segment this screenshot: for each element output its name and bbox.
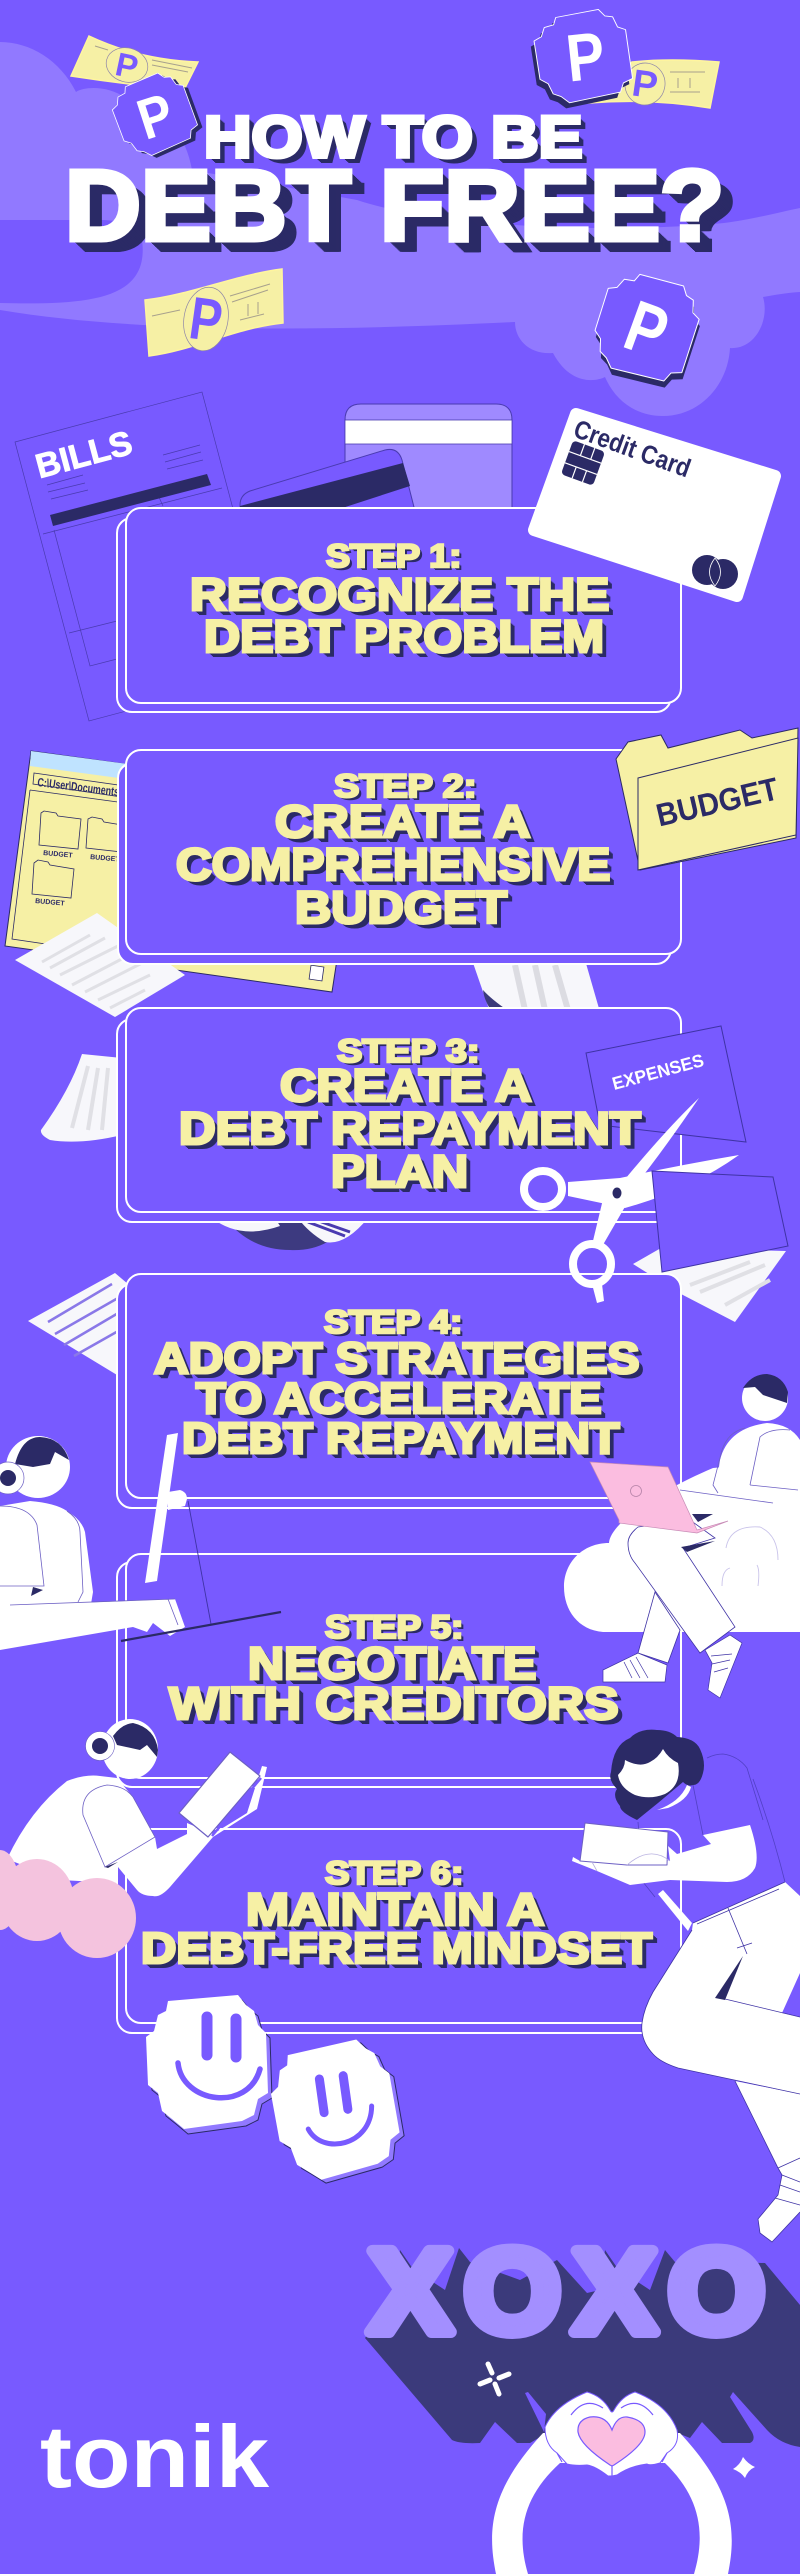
heart hands [545,2392,678,2476]
paper curl: under step 3 [212,1218,368,1250]
shadow notch [525,2392,546,2432]
xoxo: XOXO [369,2225,777,2357]
xoxo extruded shadow [365,2248,800,2447]
step 5 heading: STEP 5: [324,1609,463,1645]
step 1 heading [190,538,613,662]
yellow file window [5,751,362,992]
panel: step 6 [117,1829,681,2033]
step 2 heading [176,768,614,933]
smiley coin 1 [146,1995,272,2134]
background cloud [0,42,800,416]
step 2 heading: COMPREHENSIVE [176,839,610,890]
step 1 heading: DEBT PROBLEM [204,611,604,662]
step 6 heading: STEP 6: [324,1855,463,1891]
white cloud right [564,1460,800,1632]
paper: left of step 3 [41,1054,122,1142]
panel: step 3 [117,1008,681,1222]
second sheet [652,1171,788,1272]
step 3 heading: STEP 3: [336,1033,479,1069]
step 1 heading: STEP 1: [326,538,461,574]
paper: between steps 2 and 3 [472,960,600,1012]
panel: step 1 [117,508,681,712]
step 6 heading: DEBT-FREE MINDSET [141,1924,652,1973]
step 2 heading: CREATE A [275,796,530,847]
expenses sheet: EXPENSES [610,1050,706,1094]
step 5 heading: NEGOTIATE [248,1638,536,1689]
step 4 heading: DEBT REPAYMENT [182,1414,619,1463]
coin: right: P [615,285,678,374]
step 3 heading: CREATE A [280,1060,532,1111]
credit card: Credit Card [570,413,695,483]
logo: tonik [40,2407,269,2506]
bills document [15,392,276,721]
step 3 heading: PLAN [331,1146,468,1197]
person: laptop [590,1374,800,1698]
step 5 heading [166,1609,622,1729]
step 4 heading: ADOPT STRATEGIES [154,1334,639,1383]
yellow file window: BUDGET [43,850,74,860]
sparkle [480,2364,509,2394]
ring [492,2433,732,2574]
money note: top left: P [112,45,142,86]
coin: top right [528,7,635,111]
yellow file window: C:\User\Documents [37,775,120,799]
step 6 heading: MAINTAIN A [246,1884,544,1935]
step 2 heading: STEP 2: [334,768,476,804]
step 4 heading [152,1304,643,1463]
person: woman with tablet [572,1730,800,2242]
step 3 heading: DEBT REPAYMENT [179,1103,641,1154]
coin: left: P [130,81,181,152]
budget folder: BUDGET [653,770,782,833]
diamond sparkle [733,2457,755,2478]
step 3 heading [179,1033,646,1197]
paper: under window [15,913,185,1017]
person: reading tablet [7,1719,267,1896]
step 1 heading: RECOGNIZE THE [190,569,609,620]
step 6 heading [141,1855,658,1973]
money note: center left [145,269,283,356]
yellow file window: BUDGET [90,854,121,864]
front card with dark stripe [240,449,416,515]
money note: top right: P [629,62,660,108]
expenses sheet [586,1026,746,1142]
budget folder [616,728,798,870]
coin: right [581,262,713,398]
coin: left [106,65,207,166]
panel: step 5 [117,1554,681,1787]
step 4 heading: STEP 4: [324,1304,462,1340]
coin: top right: P [563,19,608,97]
paper: left of step 4 [28,1273,128,1378]
step 4 heading: TO ACCELERATE [196,1374,602,1423]
bills document: BILLS [32,424,136,486]
money note: top right [589,60,719,108]
step 5 heading: WITH CREDITORS [169,1678,619,1729]
money note: center left: P [185,284,226,355]
yellow file window: BUDGET [35,898,66,908]
back card [345,404,512,520]
panel: step 2 [118,750,681,964]
credit card [534,413,775,596]
step 2 heading: BUDGET [295,882,507,933]
title: DEBT FREE? [65,150,724,262]
pink cloud [0,1850,136,1958]
title: HOW TO BE [204,105,582,170]
money note: top left [71,36,198,90]
panel: step 4 [117,1274,681,1508]
scissors [524,1098,739,1303]
smiley coin 2 [265,2035,409,2189]
person: teacher [0,1433,281,1650]
paper: right of step 4 [633,1248,786,1322]
